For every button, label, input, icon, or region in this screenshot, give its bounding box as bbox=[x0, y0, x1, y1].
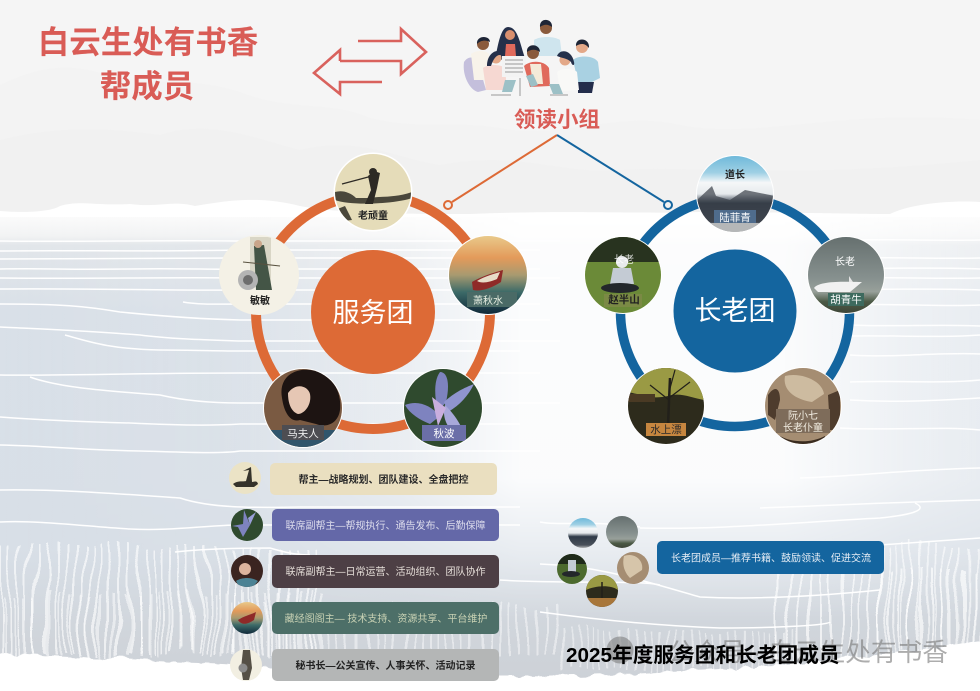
role: 帮主: 帮主—战略规划、团队建设、全盘把控 bbox=[298, 473, 468, 486]
roles list: service team bbox=[229, 462, 499, 681]
avatar: 水上漂: 水上漂 bbox=[650, 424, 682, 436]
title: 帮成员 bbox=[100, 68, 194, 104]
avatar: 秋波 bbox=[403, 368, 483, 448]
avatar: 阮小七: 阮小七 bbox=[788, 410, 818, 422]
avatar: 赵半山: 长老 bbox=[614, 253, 634, 266]
title bbox=[38, 24, 258, 104]
avatar: 敏敏 bbox=[219, 235, 299, 315]
elders team hub bbox=[674, 250, 796, 372]
icon: reading group people bbox=[464, 20, 600, 96]
role: 藏经阁阁主 bbox=[231, 602, 499, 634]
caption: 2025年度服务团和长老团成员 bbox=[566, 643, 840, 667]
role: 帮主 bbox=[229, 462, 497, 495]
elders team hub: 长老团 bbox=[694, 296, 776, 326]
role: 联席副帮主 帮规: 联席副帮主—帮规执行、通告发布、后勤保障 bbox=[286, 519, 486, 532]
avatar: 胡青牛 bbox=[807, 236, 885, 314]
watermark: 公众号 · 白云生处有书香 bbox=[668, 638, 948, 667]
avatar: 陆菲青: 陆菲青 bbox=[719, 211, 751, 224]
avatar: 马夫人 bbox=[263, 368, 343, 450]
avatar: 阮小七 bbox=[764, 367, 842, 445]
avatar: 马夫人: 马夫人 bbox=[287, 428, 319, 440]
role: 联席副帮主 日常: 联席副帮主—日常运营、活动组织、团队协作 bbox=[286, 565, 486, 578]
role: 联席副帮主 日常 bbox=[231, 555, 499, 588]
avatar: 萧秋水 bbox=[448, 235, 528, 315]
role: 联席副帮主 帮规 bbox=[231, 509, 499, 541]
heading: reading group: 领读小组 bbox=[514, 108, 600, 132]
panel: elders team ring bbox=[584, 155, 885, 445]
role: 秘书长: 秘书长—公关宣传、人事关怀、活动记录 bbox=[296, 659, 476, 672]
avatar: 秋波: 秋波 bbox=[434, 427, 455, 440]
connector: to service team bbox=[444, 135, 557, 209]
avatar: 老顽童 bbox=[333, 152, 413, 232]
title: 白云生处有书香 bbox=[38, 24, 258, 60]
icon: two-way arrows bbox=[314, 29, 426, 94]
panel: service team ring bbox=[219, 152, 528, 450]
avatar: 赵半山 bbox=[584, 236, 662, 314]
avatar: 陆菲青: 道长 bbox=[725, 168, 745, 181]
avatar: 胡青牛: 长老 bbox=[835, 255, 855, 268]
avatar: 老顽童: 老顽童 bbox=[358, 209, 388, 222]
avatar: 赵半山: 赵半山 bbox=[608, 293, 640, 306]
role: 秘书长 bbox=[230, 649, 499, 681]
avatar: 水上漂 bbox=[627, 367, 705, 445]
role: elders team members bbox=[657, 541, 884, 574]
connector: to elders team bbox=[557, 135, 672, 209]
avatar: 敏敏: 敏敏 bbox=[250, 294, 270, 307]
avatar: 阮小七: 长老仆童 bbox=[783, 421, 823, 434]
service team hub bbox=[311, 250, 435, 374]
elders small avatars bbox=[557, 516, 649, 608]
role: 藏经阁阁主: 藏经阁阁主— 技术支持、资源共享、平台维护 bbox=[285, 612, 487, 625]
avatar: 胡青牛: 胡青牛 bbox=[830, 293, 862, 306]
avatar: 陆菲青 bbox=[696, 155, 777, 233]
role: elders team members: 长老团成员—推荐书籍、鼓励领读、促进交流 bbox=[671, 552, 871, 564]
avatar: 萧秋水: 萧秋水 bbox=[473, 294, 503, 307]
service team hub: 服务团 bbox=[332, 298, 414, 328]
